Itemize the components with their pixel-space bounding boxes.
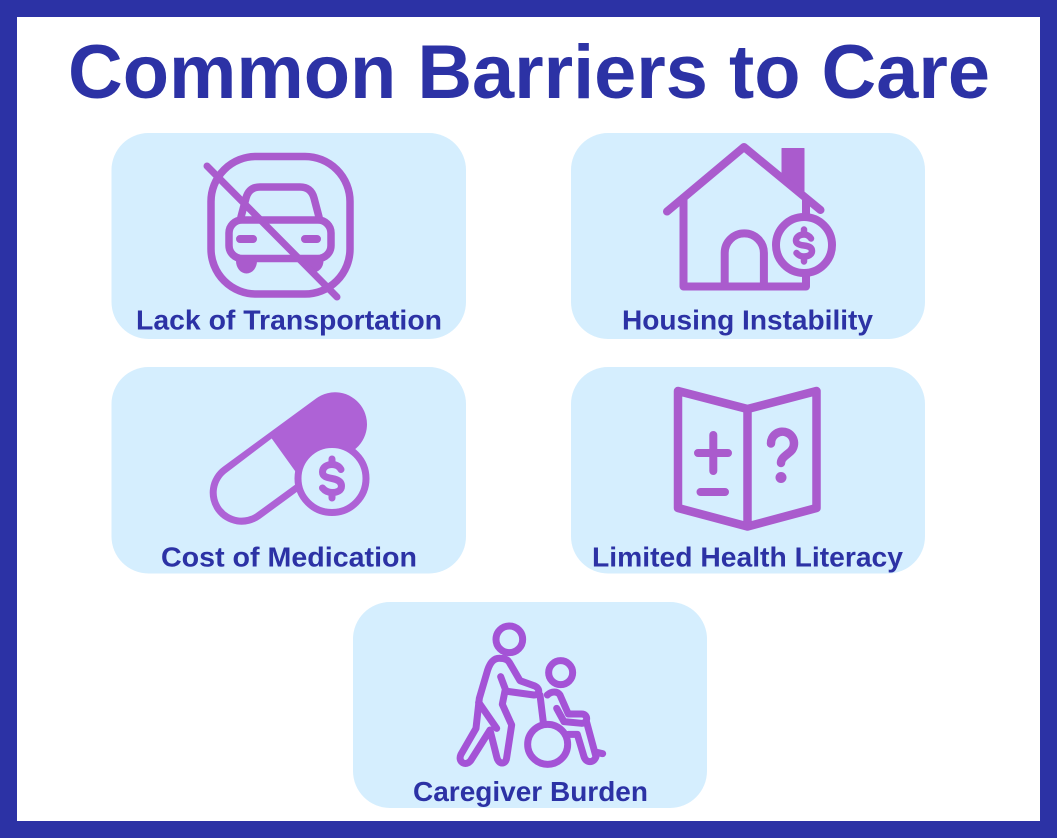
card background: [353, 602, 707, 808]
card background: [112, 133, 466, 339]
card background: [571, 133, 925, 339]
panel: limited health literacy: [571, 367, 925, 574]
label: cost of medication: Cost of Medication: [161, 542, 417, 572]
panel: lack of transportation: [112, 133, 466, 339]
icon: pill with dollar coin: [217, 424, 366, 518]
panel: housing instability: [571, 133, 925, 339]
panel: caregiver burden: [353, 602, 707, 808]
label: housing instability: Housing Instability: [622, 304, 874, 336]
icon: caregiver pushing wheelchair: [460, 626, 603, 764]
icon: open book with plus-minus and question mark: [678, 391, 816, 526]
panel: cost of medication: [112, 367, 466, 574]
label: lack of transportation: Lack of Transportation: [136, 304, 442, 336]
card background: [571, 367, 925, 574]
icon: crossed-out car: [207, 156, 350, 297]
card background: [112, 367, 466, 574]
label: limited health literacy: Limited Health Literacy: [592, 542, 904, 572]
icon: house with dollar coin: [667, 147, 832, 286]
title: Common Barriers to Care: [68, 30, 990, 115]
label: caregiver burden: Caregiver Burden: [413, 776, 648, 807]
